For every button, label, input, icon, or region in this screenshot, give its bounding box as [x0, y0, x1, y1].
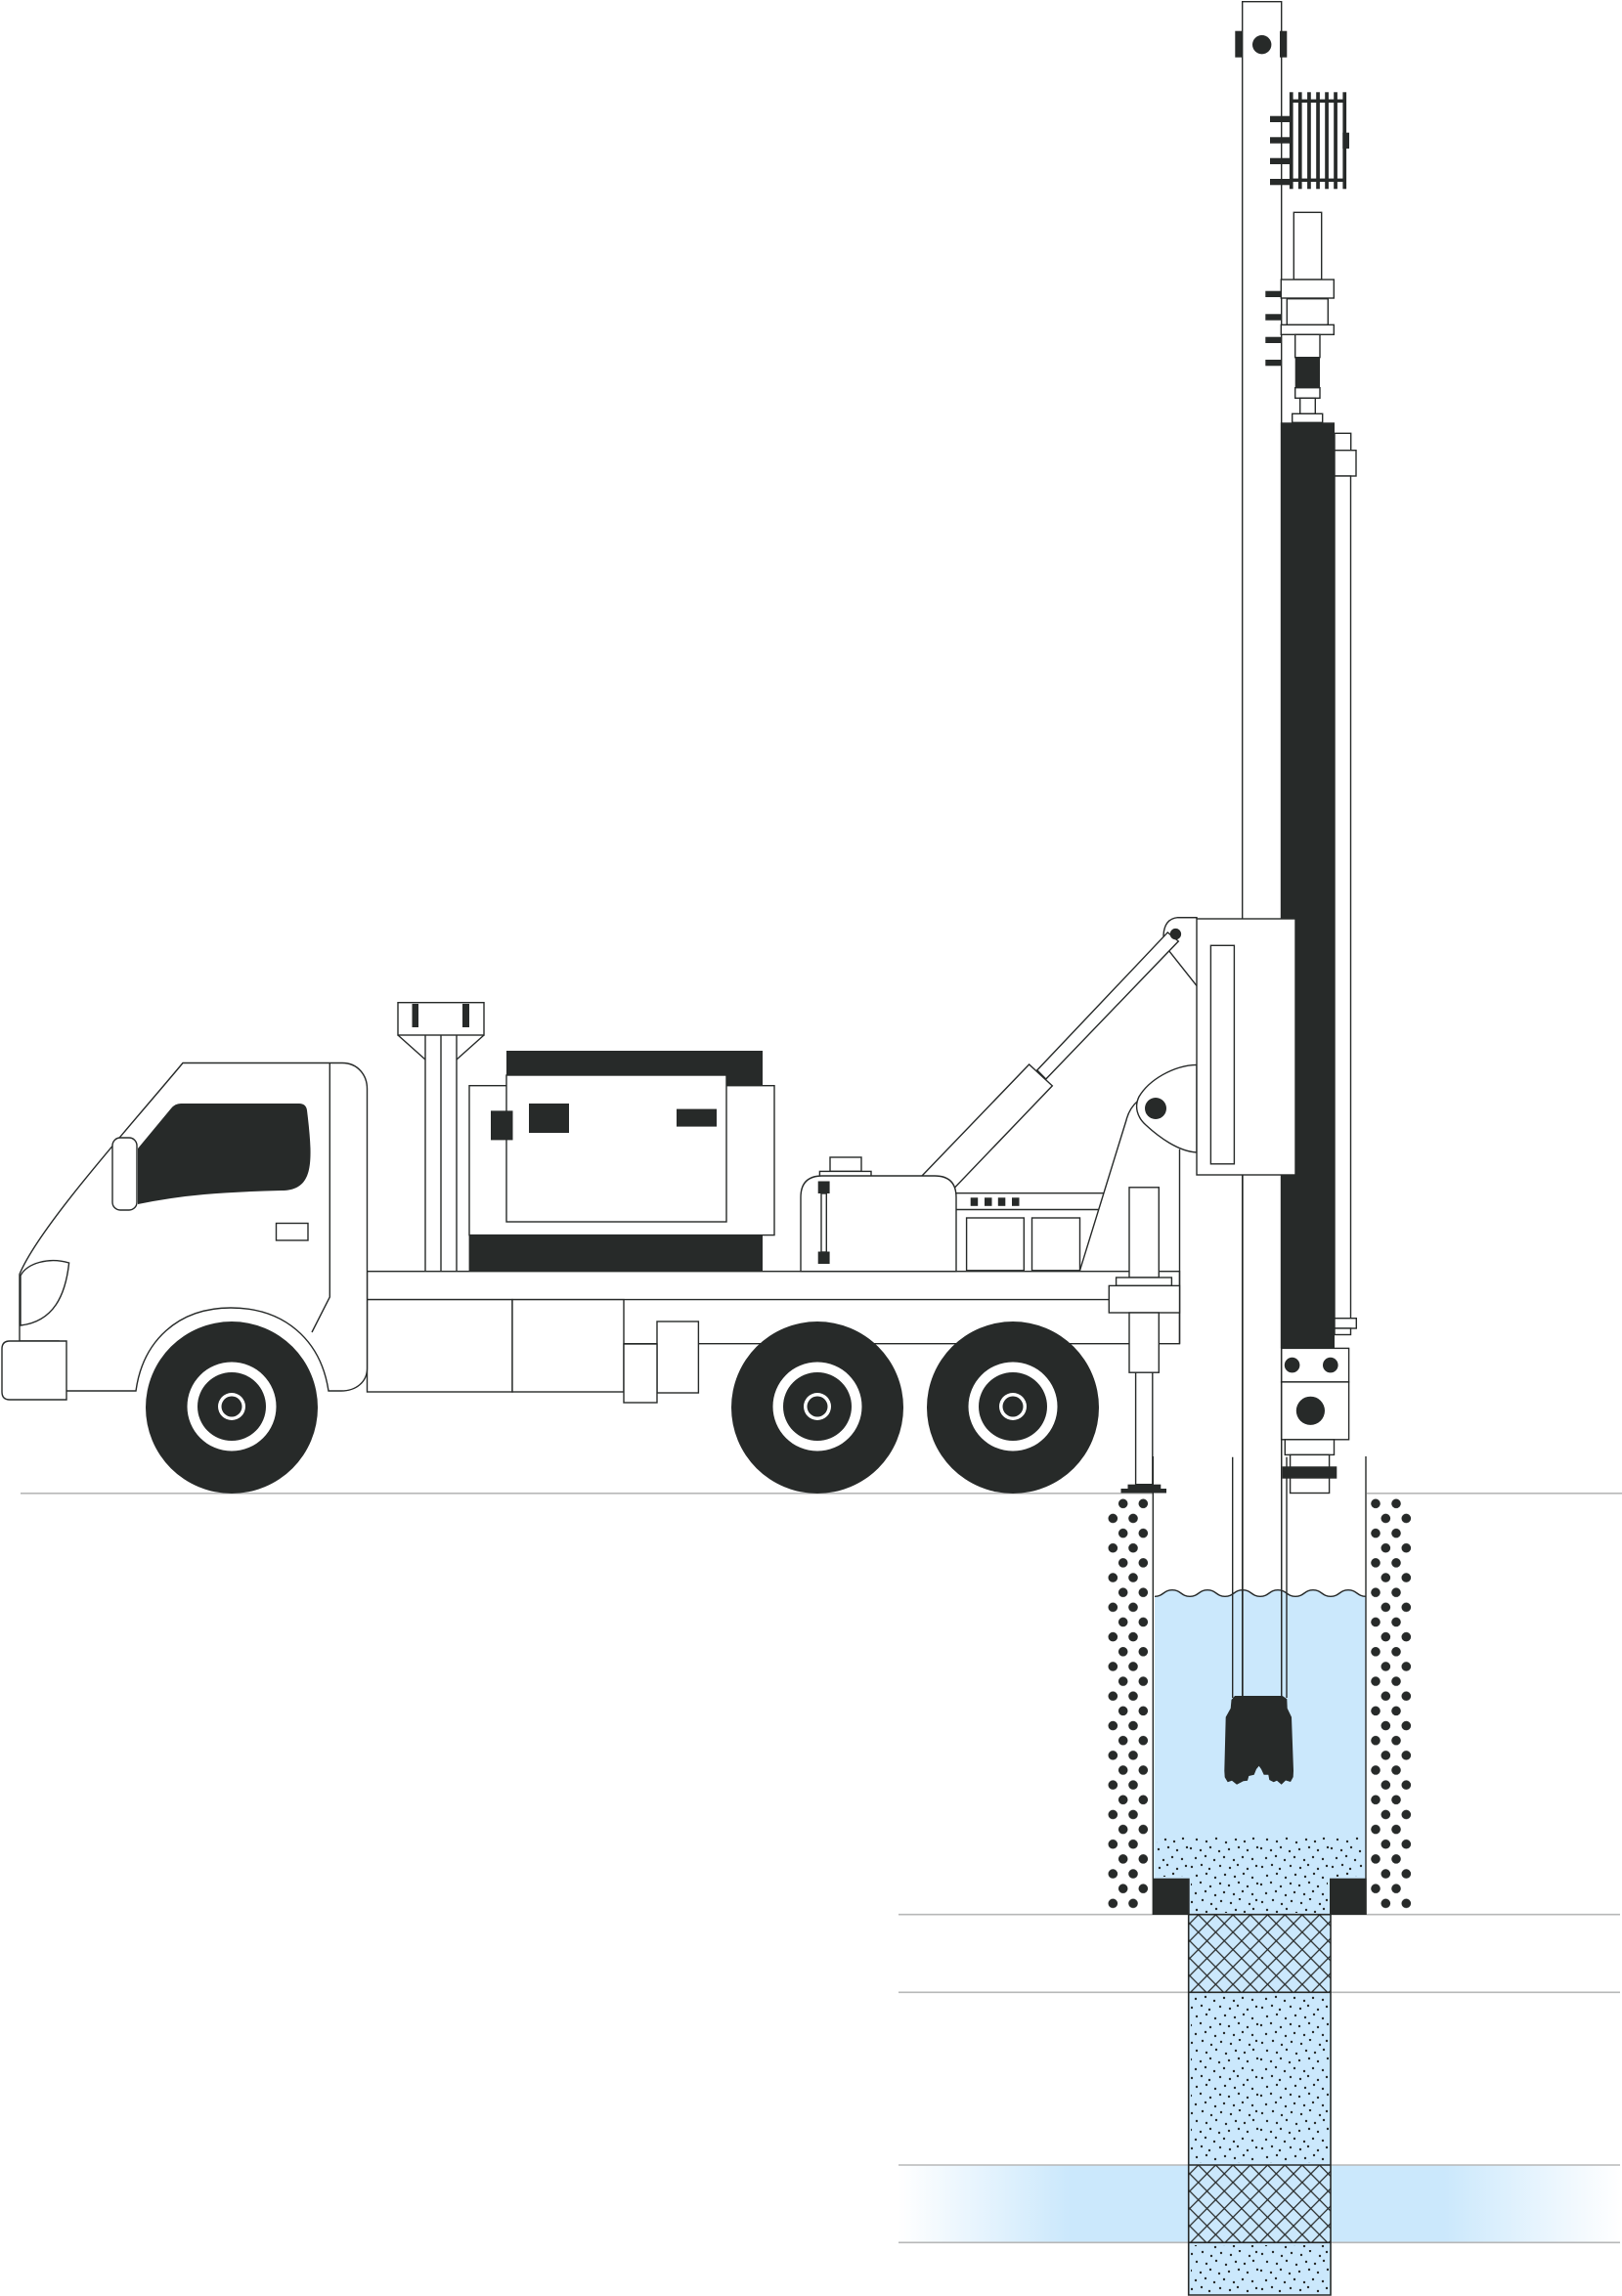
casing shoe left [1153, 1879, 1190, 1915]
hydraulic tank [801, 1157, 956, 1272]
truck [2, 1003, 1179, 1494]
drill bit [1224, 1696, 1293, 1785]
chassis boxes [368, 1272, 1179, 1403]
front wheel [146, 1321, 318, 1494]
front bumper [2, 1341, 66, 1400]
ground and strata lines [21, 1494, 1622, 2242]
lower pivot [1145, 1098, 1166, 1119]
side mirror [112, 1138, 137, 1210]
open hole outline [1189, 1915, 1331, 2295]
lift arm rod [1037, 932, 1178, 1079]
top clamp bars [1235, 31, 1243, 58]
casing walls [1153, 1456, 1366, 1915]
headlight [21, 1261, 69, 1325]
borehole [1105, 1456, 1414, 2295]
lower bracket [1137, 1064, 1197, 1152]
lift arm cylinder [922, 1064, 1052, 1188]
mast rails [1243, 2, 1282, 1696]
top bracket line [1177, 917, 1197, 919]
aquifer band [899, 2165, 1620, 2242]
black feed column [1281, 422, 1335, 1348]
rear wheel [927, 1321, 1099, 1494]
mast [1235, 2, 1356, 1696]
rotary head block [1282, 1348, 1349, 1494]
rock fill right of casing [1369, 1497, 1414, 1911]
sediment at casing bottom [1157, 1834, 1363, 1913]
mast support leg [1079, 1101, 1179, 1344]
carriage slot [1210, 945, 1234, 1164]
outrigger jack [1109, 1188, 1179, 1494]
mast carriage [1037, 918, 1295, 1175]
hatched stratum aquifer [1189, 2165, 1331, 2242]
carriage plate [1197, 919, 1295, 1175]
drill string [1224, 1175, 1293, 1785]
swivel stack [1265, 212, 1334, 422]
water in casing [1154, 1590, 1366, 1915]
control panel [956, 1193, 1104, 1271]
grid rack [1270, 92, 1349, 189]
upper pivot [1170, 929, 1181, 939]
top pulley [1252, 35, 1271, 54]
generator [469, 1051, 774, 1272]
sand stratum middle [1191, 1995, 1329, 2163]
hatched stratum upper [1189, 1915, 1331, 1992]
sand stratum lower [1191, 2245, 1329, 2293]
middle wheel [731, 1321, 903, 1494]
upper bracket [1163, 918, 1197, 986]
cab window [138, 1104, 311, 1204]
open hole water column [1189, 1915, 1331, 2295]
water surface [1155, 1590, 1366, 1596]
exhaust stack [398, 1003, 484, 1272]
side cylinder [1335, 433, 1356, 1335]
door handle [276, 1224, 308, 1240]
cab [20, 1063, 368, 1391]
rock fill left of casing [1105, 1497, 1150, 1911]
casing shoe right [1330, 1879, 1367, 1915]
cab door line [312, 1063, 329, 1332]
